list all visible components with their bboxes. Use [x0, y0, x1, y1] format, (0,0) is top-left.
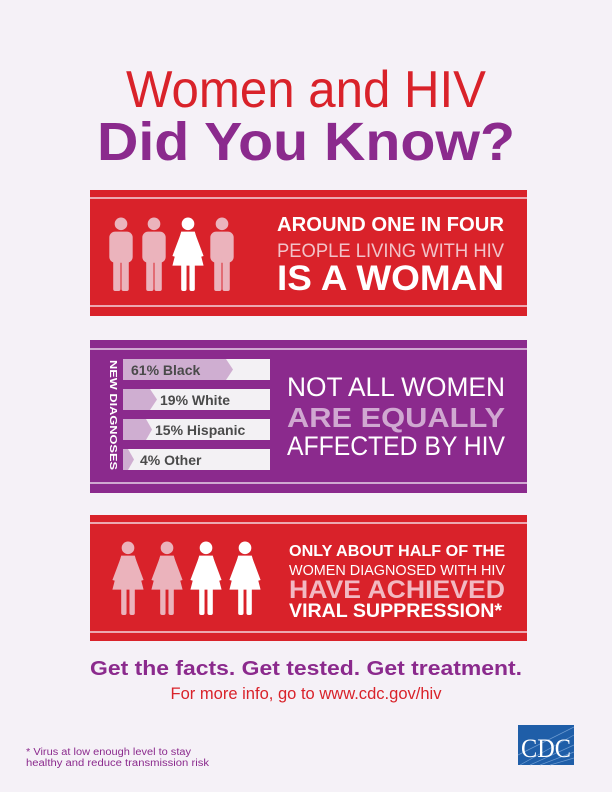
logo: CDC: CDC [521, 734, 571, 763]
text: not all women [287, 372, 505, 461]
text: one in four [277, 214, 505, 298]
bar chart: 61% Black [131, 362, 200, 378]
panel: one in four [90, 190, 527, 316]
footnote [26, 747, 210, 769]
icon: four people, one woman [109, 217, 234, 291]
bar chart [123, 359, 270, 470]
text: not all women: ARE EQUALLY [287, 402, 505, 433]
call to action: Get the facts. Get tested. Get treatment. [90, 658, 522, 680]
text: viral suppression: WOMEN DIAGNOSED WITH HIV [289, 562, 505, 579]
title [97, 61, 515, 172]
text: one in four: AROUND ONE IN FOUR [277, 214, 505, 236]
bar chart: 19% White [160, 392, 230, 408]
text: viral suppression [289, 543, 505, 622]
logo: CDC [518, 725, 574, 765]
footnote: * Virus at low enough level to stay [26, 747, 191, 758]
info link: For more info, go to www.cdc.gov/hiv [170, 684, 442, 703]
bar chart: 4% Other [140, 452, 202, 468]
title: Did You Know? [97, 112, 515, 172]
panel: viral suppression [90, 515, 527, 641]
footnote: healthy and reduce transmission risk [26, 758, 210, 769]
text: viral suppression: HAVE ACHIEVED [289, 576, 505, 604]
text: not all women: NOT ALL WOMEN [287, 372, 505, 402]
panel: new diagnoses [90, 340, 527, 493]
text: one in four: PEOPLE LIVING WITH HIV [277, 241, 504, 262]
icon: four women [112, 541, 261, 615]
text: not all women: AFFECTED BY HIV [287, 431, 505, 461]
text: viral suppression: ONLY ABOUT HALF OF THE [289, 543, 505, 560]
text: one in four: IS A WOMAN [277, 259, 504, 298]
title: Women and HIV [126, 61, 486, 119]
bar chart: 15% Hispanic [155, 422, 245, 438]
text: viral suppression: VIRAL SUPPRESSION* [289, 601, 503, 622]
label: new diagnoses: NEW DIAGNOSES [107, 360, 118, 470]
